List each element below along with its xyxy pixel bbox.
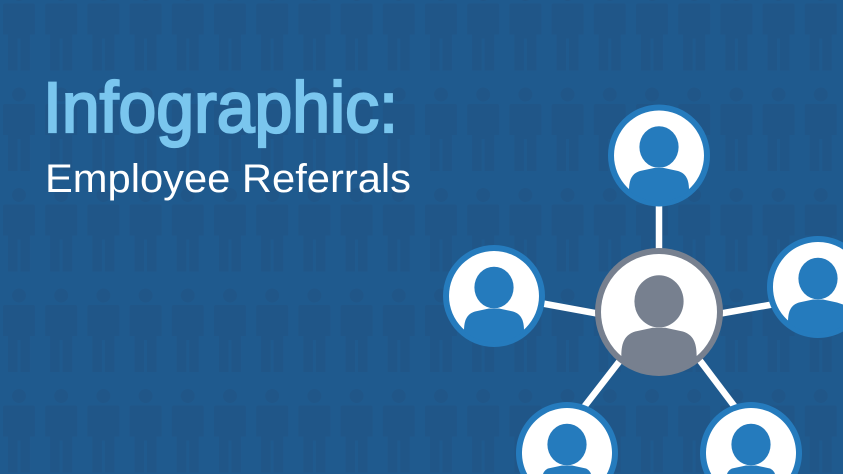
- node: bottom-right person: [700, 402, 802, 474]
- node: central person: [595, 248, 723, 376]
- network connector lines: [540, 200, 775, 407]
- subtitle: Employee Referrals: Employee Referrals: [45, 157, 411, 201]
- title: Infographic: Infographic:: [43, 69, 398, 148]
- node: right person: [767, 236, 843, 338]
- node: bottom-left person: [516, 402, 618, 474]
- node: top person: [608, 104, 710, 206]
- node: left person: [443, 245, 545, 347]
